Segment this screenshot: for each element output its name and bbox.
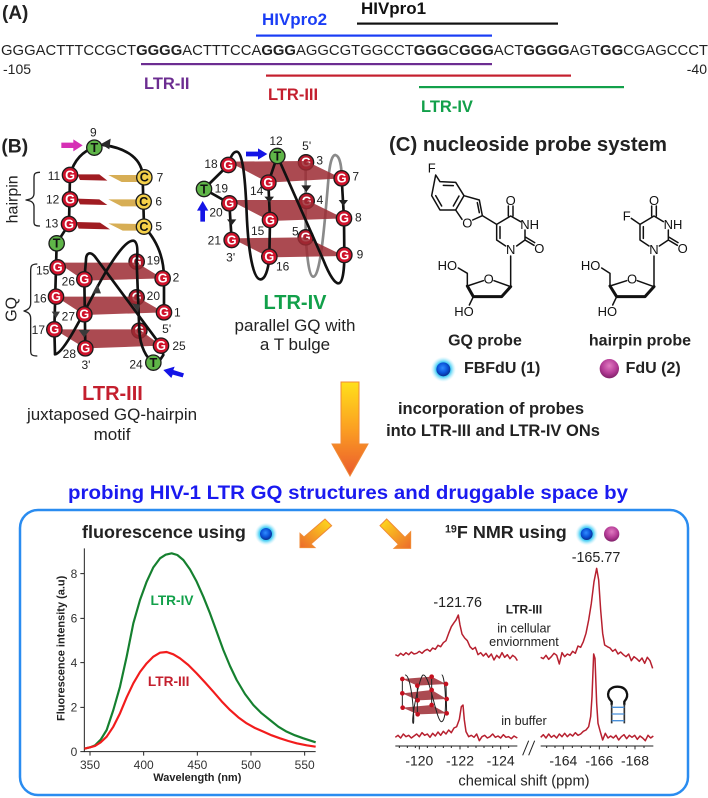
visible nucleotides: G	[264, 250, 274, 264]
residue numbers: 12	[46, 192, 60, 206]
spectrum: cellular FBF peak	[395, 615, 517, 661]
panel B: LTR-IV topology diagram	[196, 134, 364, 283]
visible nucleotides: G	[65, 168, 75, 182]
visible nucleotides: G	[53, 261, 63, 275]
visible nucleotides: G	[263, 176, 273, 190]
residue numbers: 11	[48, 169, 61, 183]
residue numbers: 20	[147, 289, 160, 303]
spectrum: cellular FdU peak	[541, 568, 653, 668]
residue numbers: 6	[155, 195, 162, 209]
LTR-IV name: LTR-IV	[264, 292, 327, 314]
strand backbone	[204, 152, 348, 283]
LTR-IV bar	[419, 86, 624, 88]
HIVpro2 label: HIVpro2	[262, 10, 327, 29]
hairpin base pairs	[76, 174, 140, 231]
structure: FBFdU: O	[534, 241, 544, 256]
visible nucleotides: G	[156, 339, 166, 353]
residue numbers: 5	[292, 225, 299, 239]
icon: mini hairpin	[608, 687, 627, 723]
visible nucleotides: G	[339, 248, 349, 262]
chart axes: 400	[134, 758, 154, 772]
structure: FdU: HO	[581, 258, 600, 273]
LTR-III label: LTR-III	[268, 86, 318, 104]
icon: blue probe	[575, 523, 598, 545]
LTR-III name: LTR-III	[82, 383, 143, 405]
x axis title: Wavelength (nm)	[153, 772, 242, 784]
GQ brace and label: GQ	[4, 297, 21, 322]
structure: FBFdU: NH	[520, 217, 539, 232]
tick labels: -124	[487, 752, 515, 768]
residue numbers: 7	[352, 170, 359, 184]
structure: FdU: HO	[598, 304, 617, 319]
arrow: magenta probe site	[61, 139, 83, 151]
LTR-III curve label: LTR-III	[148, 674, 189, 689]
structure: FBFdU: O	[462, 215, 472, 230]
panel A: LTR sequence map	[1, 0, 708, 116]
residue numbers: 13	[45, 217, 59, 231]
panel A label: (A)	[2, 3, 28, 24]
visible nucleotides: G	[265, 213, 275, 227]
incorporation caption: incorporation of probes	[398, 400, 584, 418]
visible nucleotides: G	[337, 172, 347, 186]
LTR-IV curve label: LTR-IV	[151, 593, 194, 608]
residue numbers: 9	[357, 247, 364, 261]
residue numbers	[32, 126, 186, 372]
grey loop and hidden strand	[301, 155, 342, 277]
visible nucleotides: C	[140, 171, 149, 185]
tick labels: -120	[405, 752, 434, 768]
residue numbers: 9	[90, 126, 97, 140]
residue numbers: 5'	[162, 322, 171, 336]
peak value -121.76: -121.76	[433, 595, 482, 611]
incorporation caption: into LTR-III and LTR-IV ONs	[386, 422, 600, 440]
structure: FdU: F	[623, 208, 631, 223]
DNA sequence: GGGACTTTCCGCTGGGGACTTTCCAGGGAGGCGTGGCCTGGGCGGGACTGGGGAGTGGCGAGCCCT	[1, 42, 708, 59]
structure: FdU: NH	[664, 217, 682, 232]
axis: right segment	[541, 746, 653, 749]
residue numbers	[204, 134, 364, 274]
icon: mini GQ structure	[400, 674, 449, 723]
structure: FBFdU	[428, 161, 544, 319]
GQ brace and label	[4, 264, 37, 356]
arrow: to NMR	[380, 519, 411, 548]
LTR-II label: LTR-II	[144, 75, 190, 93]
visible nucleotides: C	[139, 220, 149, 234]
icon: blue fluorescent probe	[431, 357, 456, 382]
LTR-III description: juxtaposed GQ-hairpin	[27, 405, 197, 424]
residue numbers: 2	[173, 271, 180, 285]
structure: FBFdU: N	[506, 242, 515, 257]
residue numbers: 16	[276, 260, 290, 274]
visible nucleotides	[47, 140, 172, 370]
icon: blue probe	[255, 523, 277, 545]
spectrum: buffer FBF peak	[395, 705, 517, 741]
residue numbers: 3	[316, 154, 323, 168]
visible nucleotides: G	[65, 193, 75, 207]
structure: FdU: O	[627, 271, 637, 286]
visible nucleotides: C	[139, 195, 148, 209]
hidden guanines: G	[301, 156, 311, 170]
19F NMR section	[380, 519, 653, 789]
G-tetrad planes	[54, 263, 164, 348]
NMR heading: F NMR using	[457, 522, 567, 542]
structure: FBFdU: O	[506, 193, 516, 208]
in buffer caption: in buffer	[501, 714, 547, 728]
structure: FdU: O	[678, 241, 688, 256]
hidden guanines behind tetrads	[129, 254, 147, 338]
structure: FBFdU: HO	[438, 258, 457, 273]
visible nucleotides: T	[273, 149, 281, 163]
tick labels: -168	[621, 752, 649, 768]
chart axes: 450	[187, 758, 208, 772]
icon: magenta probe	[600, 359, 619, 378]
icon: magenta probe	[604, 526, 619, 542]
residue numbers: 20	[209, 205, 223, 219]
chart axes: 6	[71, 612, 78, 626]
residue numbers: 15	[36, 264, 50, 278]
arrow: incorporation step	[332, 382, 368, 476]
visible nucleotides: G	[224, 197, 234, 211]
position -40: -40	[687, 61, 707, 77]
blue section title: probing HIV-1 LTR GQ structures and druggable space by	[68, 483, 628, 504]
fluorescence section	[55, 519, 332, 784]
residue numbers: 16	[33, 291, 47, 305]
cellular environment caption: enviornment	[489, 635, 559, 649]
residue numbers: 24	[129, 357, 143, 371]
cellular environment caption: in cellular	[497, 622, 551, 636]
LTR-II bar	[141, 63, 492, 65]
visible nucleotides: G	[64, 217, 74, 231]
visible nucleotides: G	[227, 233, 237, 247]
structure: FdU: O	[649, 193, 659, 208]
hairpin brace and label	[4, 172, 40, 226]
visible nucleotides: G	[79, 273, 89, 287]
chart axes: 8	[71, 567, 78, 581]
arrow: blue probe site top	[246, 148, 267, 160]
structure: FBFdU: F	[428, 161, 436, 176]
chart axes: 500	[241, 758, 261, 772]
axis: left segment	[395, 746, 517, 749]
residue numbers: 28	[63, 347, 76, 361]
chart axes	[71, 548, 316, 772]
hidden guanines: G	[302, 194, 312, 208]
residue numbers: 14	[250, 184, 264, 198]
visible nucleotides: T	[149, 356, 157, 370]
y axis title: Fluorescence intensity (a.u)	[55, 575, 67, 721]
residue numbers: 3'	[82, 358, 90, 372]
hidden guanines behind tetrads: G	[132, 291, 142, 305]
panel C: chemical structures	[428, 161, 691, 382]
LTR-IV description: a T bulge	[260, 335, 330, 354]
position -105: -105	[3, 61, 31, 77]
panel B label: (B)	[1, 136, 28, 157]
residue numbers: 5'	[302, 139, 311, 153]
chemical shift axis title: chemical shift (ppm)	[458, 773, 590, 789]
FBFdU label: FBFdU (1)	[464, 360, 540, 377]
fluorescence heading: fluorescence using	[82, 522, 246, 542]
panel B: LTR-III topology diagram	[1, 126, 186, 378]
visible nucleotides: G	[159, 306, 169, 320]
LTR-III description: motif	[94, 425, 131, 444]
visible nucleotides: G	[49, 323, 59, 337]
structure: FdU: N	[649, 242, 659, 257]
chart axes: 350	[80, 758, 100, 772]
panel C heading: (C) nucleoside probe system	[389, 134, 667, 156]
hidden guanines	[298, 155, 314, 245]
G-tetrad planes	[228, 161, 344, 257]
residue numbers: 26	[62, 274, 75, 288]
tick labels	[405, 752, 649, 768]
visible nucleotides: T	[90, 141, 98, 155]
line chart: fluorescence spectra	[55, 548, 316, 784]
tick labels: -122	[446, 752, 474, 768]
structure: FBFdU: O	[484, 271, 494, 286]
arrow: blue probe site	[163, 367, 184, 378]
arrow: to fluorescence	[300, 519, 332, 548]
residue numbers: 19	[147, 254, 160, 268]
peak value -165.77: -165.77	[572, 550, 620, 566]
LTR-IV description: parallel GQ with	[235, 316, 355, 335]
chart axes: 4	[71, 656, 78, 670]
residue numbers: 27	[62, 310, 75, 324]
HIVpro2 bar	[256, 34, 492, 37]
residue numbers: 1	[174, 305, 181, 319]
FdU label: FdU (2)	[626, 360, 681, 377]
chart axes: 0	[71, 745, 78, 759]
curve: LTR-IV	[84, 553, 316, 749]
residue numbers: 17	[32, 323, 45, 337]
hairpin probe label: hairpin probe	[589, 333, 691, 350]
visible nucleotides: G	[80, 342, 90, 356]
visible nucleotides: G	[223, 158, 233, 172]
hidden guanines: G	[301, 231, 311, 245]
arrow: blue probe site left	[197, 201, 208, 222]
residue numbers: 12	[269, 134, 283, 148]
residue numbers: 3'	[226, 250, 235, 264]
visible nucleotides: G	[51, 290, 61, 304]
hidden guanines behind tetrads: G	[134, 324, 144, 338]
visible nucleotides: G	[339, 212, 349, 226]
structure: FBFdU: HO	[454, 304, 474, 319]
residue numbers: 25	[172, 339, 186, 353]
visible nucleotides: G	[79, 308, 89, 322]
residue numbers: 19	[215, 181, 228, 195]
hidden guanines behind tetrads: G	[132, 255, 142, 269]
residue numbers: 7	[157, 170, 164, 184]
visible nucleotides: G	[158, 272, 168, 286]
visible nucleotides: T	[200, 182, 208, 196]
residue numbers: 4	[317, 193, 324, 207]
LTR-IV label: LTR-IV	[421, 98, 473, 116]
NMR heading: 19	[445, 524, 457, 536]
axis break	[523, 741, 535, 755]
residue numbers: 21	[208, 234, 221, 248]
HIVpro1 bar	[357, 22, 558, 25]
visible nucleotides: T	[53, 237, 61, 251]
spectrum: buffer FdU peak	[541, 654, 653, 741]
strand backbone	[52, 139, 164, 365]
residue numbers: 5	[155, 220, 162, 234]
residue numbers: 15	[251, 224, 265, 238]
tick labels: -164	[549, 752, 578, 768]
LTR-III bar	[266, 74, 571, 77]
LTR-III NMR label: LTR-III	[506, 602, 542, 616]
chart axes: 550	[295, 758, 315, 772]
tick labels: -166	[585, 752, 614, 768]
hairpin brace and label: hairpin	[4, 175, 21, 223]
GQ probe label: GQ probe	[448, 333, 522, 350]
residue numbers: 18	[204, 157, 218, 171]
visible nucleotides	[196, 148, 352, 264]
panel: probing results box	[20, 510, 688, 795]
curve: LTR-III	[84, 652, 316, 749]
residue numbers: 8	[355, 211, 362, 225]
chart axes: 2	[71, 701, 78, 715]
structure: FdU	[581, 193, 688, 319]
